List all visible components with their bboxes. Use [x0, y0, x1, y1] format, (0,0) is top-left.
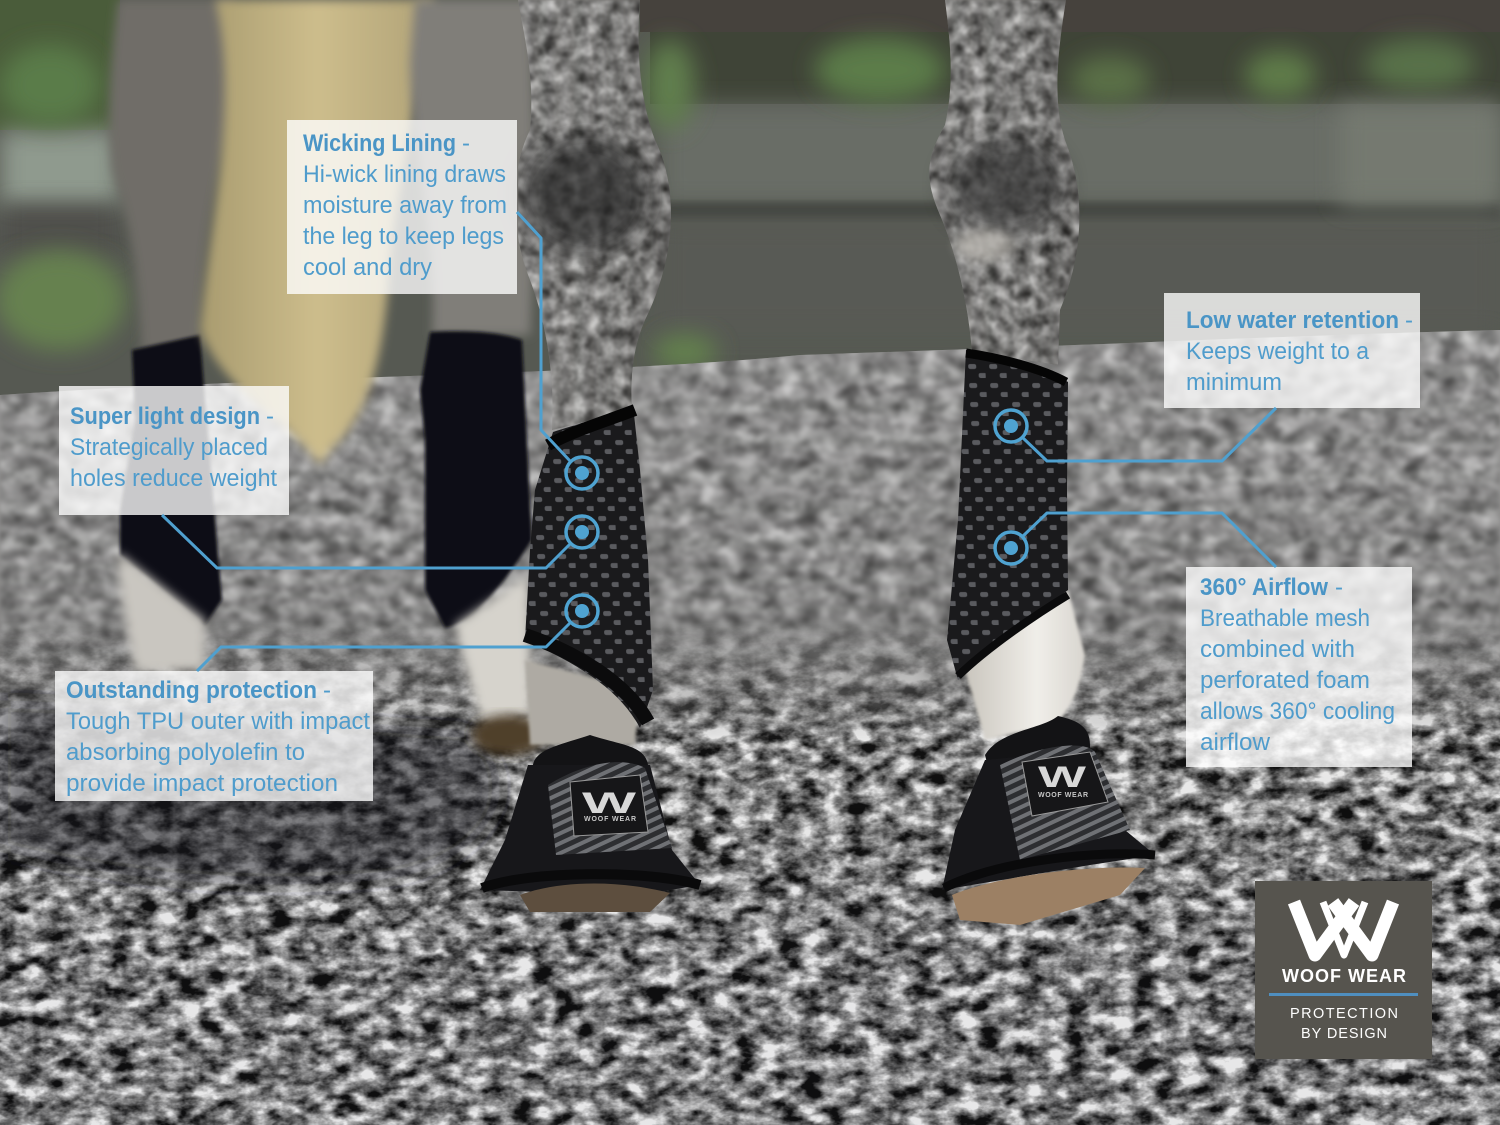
photo background: fence and foliage: [0, 0, 1500, 420]
callout: wicking lining: the leg to keep legs: [303, 223, 504, 250]
callout: wicking lining: cool and dry: [303, 254, 432, 281]
leader and marker: low water retention: [995, 408, 1276, 461]
logo: Woof Wear: PROTECTION: [1290, 1006, 1398, 1022]
rear right leg: [410, 0, 544, 755]
callout: wicking lining: Hi-wick lining draws: [303, 161, 506, 188]
callout: super light design: [59, 386, 289, 515]
leader and marker: outstanding protection: [197, 595, 598, 671]
callout: 360 airflow: [1186, 567, 1412, 767]
callout: low water retention: Low water retention: [1186, 307, 1399, 334]
callout: outstanding protection: Outstanding protection: [66, 677, 317, 704]
callout: low water retention: [1164, 293, 1420, 408]
callout: 360 airflow: airflow: [1200, 729, 1271, 756]
callout: low water retention: Keeps weight to a: [1186, 338, 1370, 365]
callout: wicking lining: Wicking Lining: [303, 130, 456, 157]
leader and marker: 360 airflow: [995, 513, 1276, 567]
right bell boot with logo patch: W: [1038, 761, 1087, 794]
callout: outstanding protection: [55, 671, 373, 801]
left bell boot with logo patch: [480, 735, 700, 912]
callout: 360 airflow: 360° Airflow: [1200, 574, 1328, 601]
callout: super light design: Super light design: [70, 403, 260, 430]
callout: outstanding protection: provide impact protection: [66, 770, 338, 797]
leader and marker: wicking lining: [517, 212, 598, 489]
leader and marker: super light design: [162, 515, 598, 568]
callout: outstanding protection: -: [323, 677, 331, 704]
callout: super light design: Strategically placed: [70, 434, 268, 461]
logo: Woof Wear: WOOF WEAR: [1282, 966, 1406, 986]
callout: super light design: holes reduce weight: [70, 465, 277, 492]
callout: 360 airflow: combined with: [1200, 636, 1355, 663]
callout: low water retention: -: [1405, 307, 1413, 334]
callout: wicking lining: moisture away from: [303, 192, 507, 219]
callout: wicking lining: -: [462, 130, 470, 157]
logo: Woof Wear: BY DESIGN: [1301, 1026, 1387, 1042]
left bell boot with logo patch: W: [582, 787, 637, 820]
rear left leg: [109, 0, 238, 672]
callout: outstanding protection: Tough TPU outer with impact: [66, 708, 370, 735]
callout: low water retention: minimum: [1186, 369, 1282, 396]
right bell boot with logo patch: [942, 716, 1155, 925]
callout: 360 airflow: perforated foam: [1200, 667, 1370, 694]
callout: super light design: -: [266, 403, 274, 430]
front left brushing boot: [525, 405, 653, 728]
front left leg: [515, 0, 678, 745]
callout: 360 airflow: Breathable mesh: [1200, 605, 1370, 632]
front right brushing boot: [947, 350, 1068, 680]
photo background: rubber gravel ground: [0, 320, 1500, 1125]
icon: double W mark: [1294, 902, 1393, 955]
left bell boot with logo patch: WOOF WEAR: [584, 816, 636, 823]
callout: 360 airflow: -: [1335, 574, 1343, 601]
callout: 360 airflow: allows 360° cooling: [1200, 698, 1395, 725]
tail: [200, 0, 435, 465]
front right leg: [925, 0, 1090, 740]
callout: outstanding protection: absorbing polyolefin to: [66, 739, 305, 766]
callout: wicking lining: [287, 120, 517, 294]
right bell boot with logo patch: WOOF WEAR: [1038, 792, 1088, 799]
logo: Woof Wear: [1255, 881, 1432, 1059]
